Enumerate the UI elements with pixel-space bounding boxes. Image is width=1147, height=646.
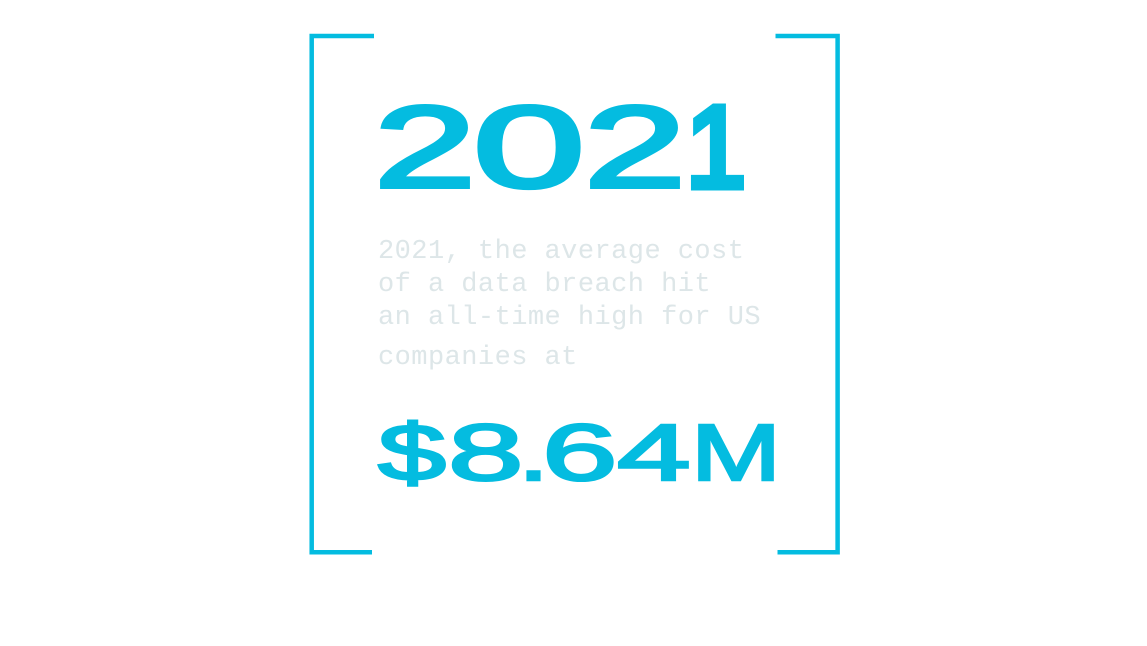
figure: cost [378, 408, 781, 497]
body text: of a data breach hit [378, 270, 711, 300]
figure: cost: 8 [448, 408, 524, 497]
heading: year: 1 [686, 82, 746, 212]
body text: companies at [378, 343, 578, 373]
left bracket [312, 36, 374, 552]
figure: cost: . [518, 408, 549, 497]
figure: cost: 4 [617, 408, 691, 497]
heading: year [374, 82, 746, 212]
right bracket [776, 36, 838, 552]
figure: cost: M [691, 408, 781, 497]
figure: cost: $ [378, 408, 446, 497]
heading: year: 2 [584, 82, 686, 212]
body text [378, 237, 761, 373]
body text: an all-time high for US [378, 303, 761, 333]
heading: year: 2 [374, 82, 476, 212]
figure: cost: 6 [542, 408, 618, 497]
body text: 2021, the average cost [378, 237, 744, 267]
heading: year: 0 [473, 82, 585, 212]
